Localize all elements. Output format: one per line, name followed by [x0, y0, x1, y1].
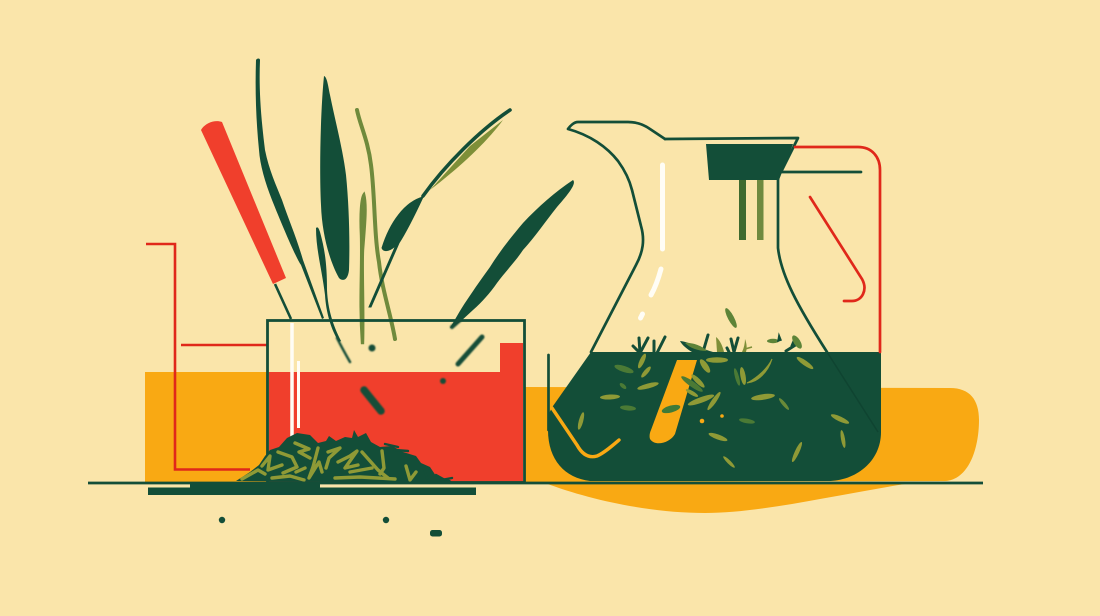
right dark leaf [450, 180, 574, 328]
jug liquid [548, 352, 881, 481]
glass container [268, 320, 524, 482]
upper right olive leaf [430, 120, 503, 190]
orange curve in liquid [552, 408, 619, 457]
falling leaves [337, 320, 482, 411]
red stick [201, 121, 291, 319]
herb pile [236, 430, 452, 482]
red jug handle [795, 147, 880, 352]
herb sprigs at surface [633, 307, 804, 353]
orange band [145, 372, 979, 513]
jug liquid inner edge [827, 352, 878, 432]
jug highlights [640, 165, 662, 318]
olive stems [357, 110, 395, 339]
red liquid in glass [269, 343, 523, 482]
jug outline [548, 122, 861, 430]
green bars [739, 180, 764, 240]
orange pill in liquid [650, 360, 697, 443]
red bracket lines left [146, 244, 268, 470]
orange dots [700, 414, 724, 423]
dots [219, 517, 442, 536]
broad dark leaf [320, 76, 349, 280]
small dark leaf [316, 227, 341, 342]
floating leaves in liquid [577, 353, 850, 469]
glass highlights [290, 323, 294, 441]
upper right dark leaf [369, 197, 423, 307]
jug lid block [706, 144, 793, 180]
plant leaves [256, 58, 574, 343]
base bar [148, 483, 476, 495]
ground line [88, 482, 983, 484]
tall thin dark leaf [256, 58, 324, 319]
upper right dark leaf stem [423, 110, 510, 196]
